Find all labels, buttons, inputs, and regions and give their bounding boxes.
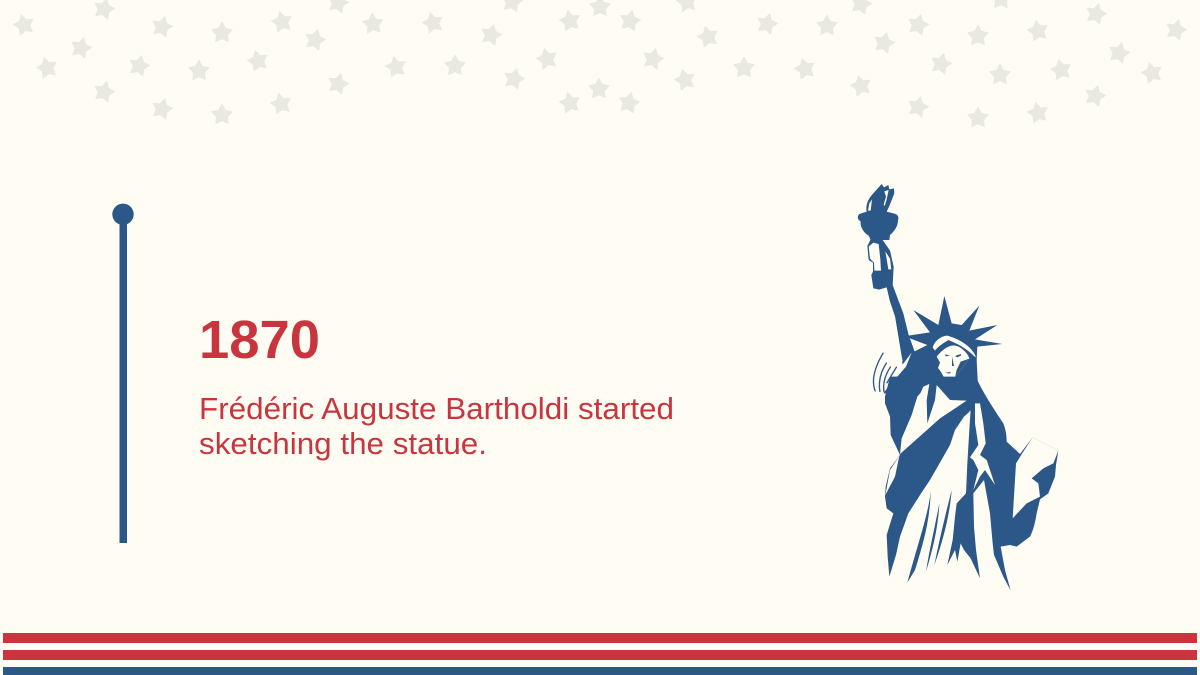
year heading: 1870 (199, 310, 320, 370)
icon: Statue of Liberty (858, 184, 1058, 591)
text block (199, 310, 674, 461)
description (199, 392, 674, 461)
star pattern background (10, 0, 1190, 127)
bottom stripes (3, 633, 1197, 675)
description: sketching the statue. (199, 427, 487, 461)
description: Frédéric Auguste Bartholdi started (199, 392, 674, 426)
timeline marker (112, 204, 134, 543)
